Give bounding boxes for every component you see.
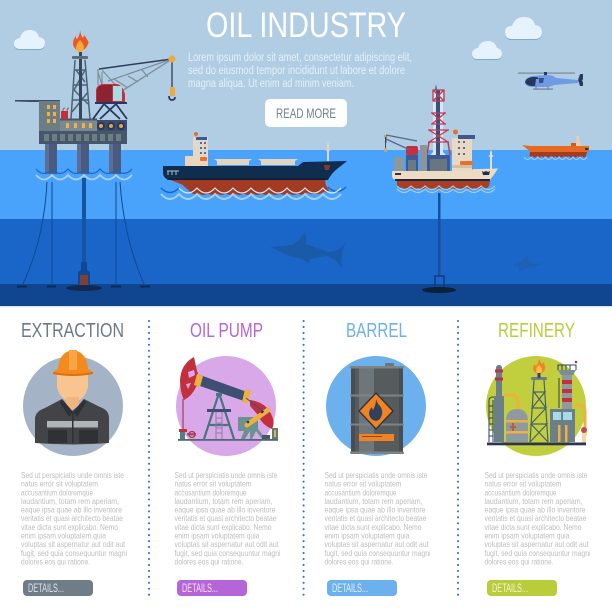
- body text: extraction: Sed ut perspiciatis unde omnis iste: [21, 470, 124, 480]
- panel: refinery: [484, 320, 591, 596]
- body text: refinery: accusantium doloremque: [484, 487, 557, 497]
- heading: barrel: BARREL: [346, 320, 407, 342]
- body text: extraction: fugit, sed quia consequuntur magni: [21, 548, 127, 558]
- ship crane: [384, 135, 417, 152]
- icon: cloud left: [14, 30, 45, 50]
- body text: refinery: vitae dicta sunt explicabo. Nemo: [484, 522, 582, 532]
- panel: extraction: [21, 320, 127, 596]
- crane: [93, 56, 176, 119]
- body text: extraction: veritatis et quasi architecto beatae: [21, 513, 123, 523]
- body text: oil pump: accusantium doloremque: [174, 487, 247, 497]
- intro paragraph: sed do eiusmod tempor incididunt ut labore et dolore: [188, 65, 405, 77]
- body text: extraction: dolores eos qui ratione.: [21, 556, 90, 566]
- mooring lines and wellhead: [17, 178, 150, 291]
- title: OIL INDUSTRY: [206, 6, 406, 45]
- body text: barrel: laudantium, totam rem aperiam,: [324, 496, 422, 506]
- ship superstructure: [452, 130, 494, 171]
- body text: refinery: enim ipsam voluptatem quia: [484, 530, 570, 540]
- details button: oil pump: DETAILS...: [182, 583, 218, 595]
- body text: barrel: eaque ipsa quae ab illo inventore: [324, 505, 426, 515]
- read more button: READ MORE: [276, 105, 336, 121]
- body text: extraction: vitae dicta sunt explicabo. Nemo: [21, 522, 118, 532]
- mooring riser: [422, 193, 456, 293]
- platform waves: [36, 169, 132, 174]
- platform legs: [45, 143, 121, 174]
- body text: barrel: dolores eos qui ratione.: [324, 556, 394, 566]
- body text: extraction: enim ipsam voluptatem quia: [21, 530, 106, 540]
- ship waves: [397, 186, 495, 192]
- platform living quarters and helipad: [15, 100, 60, 131]
- icon: tanker ship: [161, 132, 347, 199]
- icon: cloud lower right: [472, 41, 502, 60]
- body text: barrel: natus error sit voluptatem: [324, 479, 402, 489]
- ship mast: [326, 142, 330, 161]
- panel: deep sea: [0, 219, 612, 284]
- details button: extraction: [23, 580, 93, 596]
- details button: barrel: DETAILS...: [332, 583, 368, 595]
- icon: oil barrel: [326, 356, 426, 456]
- body text: refinery: Sed ut perspiciatis unde omnis iste: [484, 470, 588, 480]
- panel: upper sea: [0, 150, 612, 219]
- ship machinery blocks: [394, 145, 450, 171]
- body text: extraction: voluptas sit aspernatur aut odit aut: [21, 539, 126, 549]
- icon: large shark: [270, 232, 346, 268]
- icon: cloud upper right: [505, 17, 542, 40]
- body text: barrel: Sed ut perspiciatis unde omnis iste: [324, 470, 428, 480]
- details button: refinery: [487, 580, 557, 596]
- platform modules: [60, 108, 127, 131]
- icon: oil platform: [15, 30, 176, 291]
- body text: refinery: laudantium, totam rem aperiam,: [484, 496, 582, 506]
- body text: refinery: fugit, sed quia consequuntur magni: [484, 548, 591, 558]
- body text: oil pump: enim ipsam voluptatem quia: [174, 530, 260, 540]
- icon: refinery plant: [486, 356, 587, 456]
- body text: barrel: enim ipsam voluptatem quia: [324, 530, 410, 540]
- panel: sky: [0, 0, 612, 151]
- ship hull: [163, 161, 347, 180]
- body text: refinery: veritatis et quasi architecto beatae: [484, 513, 587, 523]
- body text: barrel: [324, 470, 431, 566]
- body text: oil pump: vitae dicta sunt explicabo. Nemo: [174, 522, 272, 532]
- ship hull: [392, 168, 498, 180]
- body text: extraction: eaque ipsa quae ab illo inventore: [21, 505, 122, 515]
- divider dots: [149, 321, 458, 600]
- ship bridge tower: [185, 132, 208, 166]
- body text: oil pump: dolores eos qui ratione.: [174, 556, 244, 566]
- body text: barrel: voluptas sit aspernatur aut odit aut: [324, 539, 429, 549]
- body text: refinery: eaque ipsa quae ab illo inventore: [484, 505, 586, 515]
- ship cargo covers: [214, 159, 298, 165]
- icon: small tanker: [522, 136, 589, 160]
- derrick: [71, 52, 90, 119]
- panel: lower white area: [0, 306, 612, 612]
- intro paragraph: magna aliqua. Ut enim ad minim veniam.: [188, 78, 354, 90]
- heading: extraction: EXTRACTION: [21, 320, 124, 342]
- body text: extraction: natus error sit voluptatem: [21, 479, 98, 489]
- icon: small shark: [513, 256, 546, 272]
- icon: pump jack: [176, 356, 278, 456]
- body text: refinery: [484, 470, 591, 566]
- body text: refinery: dolores eos qui ratione.: [484, 556, 554, 566]
- intro paragraph: [188, 52, 412, 90]
- flare flame: [73, 30, 88, 52]
- heading: refinery: REFINERY: [498, 320, 575, 342]
- derrick tower: [427, 84, 450, 158]
- details button: extraction: DETAILS...: [28, 583, 64, 595]
- body text: extraction: [21, 470, 127, 566]
- intro paragraph: Lorem ipsum dolor sit amet, consectetur adipiscing elit,: [188, 52, 412, 64]
- body text: refinery: voluptas sit aspernatur aut odit aut: [484, 539, 589, 549]
- details button: oil pump: [177, 580, 247, 596]
- body text: refinery: natus error sit voluptatem: [484, 479, 562, 489]
- body text: oil pump: eaque ipsa quae ab illo inventore: [174, 505, 276, 515]
- panel: sea floor: [0, 284, 612, 306]
- icon: helicopter: [518, 72, 583, 90]
- body text: extraction: accusantium doloremque: [21, 487, 93, 497]
- body text: barrel: veritatis et quasi architecto beatae: [324, 513, 427, 523]
- body text: barrel: vitae dicta sunt explicabo. Nemo: [324, 522, 422, 532]
- body text: oil pump: [174, 470, 281, 566]
- body text: oil pump: voluptas sit aspernatur aut odit aut: [174, 539, 279, 549]
- details button: refinery: DETAILS...: [492, 583, 528, 595]
- icon: drilling ship: [384, 84, 498, 293]
- body text: oil pump: Sed ut perspiciatis unde omnis iste: [174, 470, 278, 480]
- panel: barrel: [324, 320, 431, 596]
- body text: barrel: fugit, sed quia consequuntur magni: [324, 548, 431, 558]
- body text: extraction: laudantium, totam rem aperiam,: [21, 496, 119, 506]
- panel: oil pump: [174, 320, 281, 596]
- body text: oil pump: laudantium, totam rem aperiam,: [174, 496, 272, 506]
- details button: barrel: [327, 580, 397, 596]
- read more button: [265, 99, 347, 127]
- icon: worker: [23, 350, 123, 456]
- platform deck: [39, 131, 127, 144]
- heading: oil pump: OIL PUMP: [190, 320, 263, 342]
- body text: barrel: accusantium doloremque: [324, 487, 397, 497]
- ship waves: [161, 187, 346, 199]
- body text: oil pump: fugit, sed quia consequuntur magni: [174, 548, 281, 558]
- body text: oil pump: natus error sit voluptatem: [174, 479, 252, 489]
- body text: oil pump: veritatis et quasi architecto beatae: [174, 513, 277, 523]
